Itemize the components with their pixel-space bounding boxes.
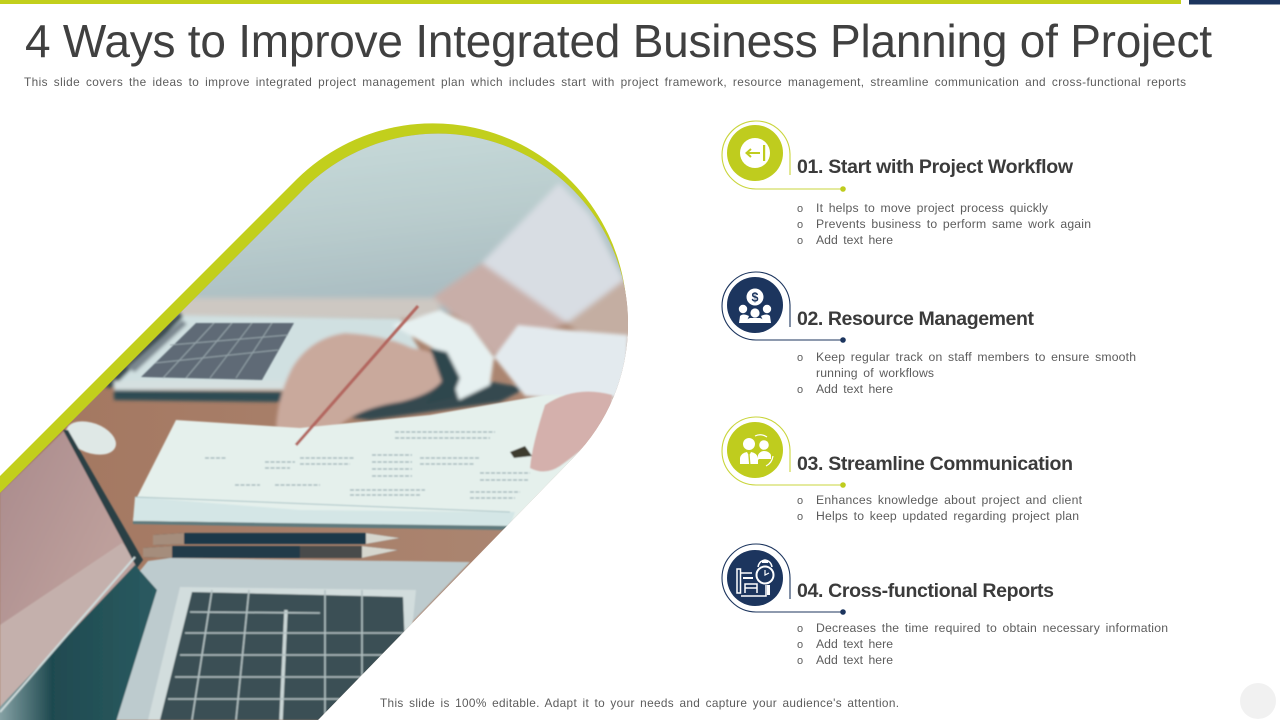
bullets 02: Keep regular track on staff members to ensure smooth xyxy=(816,350,1136,364)
item 02: resource management xyxy=(722,272,1136,396)
bullets 03: Enhances knowledge about project and client xyxy=(816,493,1083,507)
handwriting marks xyxy=(205,432,530,498)
keyboard keys xyxy=(160,592,405,720)
bullets 01 xyxy=(797,201,1091,247)
bullets 04: Add text here xyxy=(816,653,893,667)
icon: two people exchanging in green circle xyxy=(722,417,846,488)
bullets 02: o xyxy=(797,352,803,364)
mouse xyxy=(65,420,117,456)
heading 03: 03. Streamline Communication xyxy=(797,453,1073,475)
icon: report, clock and gear in navy circle xyxy=(722,544,846,615)
right hand xyxy=(530,392,612,472)
pens xyxy=(153,533,400,545)
bullets 01: o xyxy=(797,203,803,215)
second cuff xyxy=(494,325,628,402)
bullets 04: o xyxy=(797,655,803,667)
bullets 02: running of workflows xyxy=(816,366,934,380)
subtitle: This slide covers the ideas to improve integrated project management plan which includes start with project framework, resource management, streamline communication and cross-functional reports xyxy=(24,75,1186,89)
bullets 03: Helps to keep updated regarding project plan xyxy=(816,509,1079,523)
pencil xyxy=(296,306,418,445)
item 03: streamline communication xyxy=(722,417,1083,523)
heading 04: 04. Cross-functional Reports xyxy=(797,580,1054,602)
bezel and hinge xyxy=(63,430,143,568)
item 04: cross-functional reports xyxy=(722,544,1168,667)
left laptop screen xyxy=(0,430,136,629)
icon: dollar coin and team in navy circle xyxy=(722,272,846,343)
bullets 02 xyxy=(797,350,1136,396)
bullets 04: Add text here xyxy=(816,637,893,651)
bullets 01: Prevents business to perform same work again xyxy=(816,217,1091,231)
back laptop body xyxy=(106,315,420,387)
footer note: This slide is 100% editable. Adapt it to your needs and capture your audience's attention. xyxy=(380,696,899,710)
top accent bar: navy xyxy=(1189,0,1280,4)
icon: dollar coin and team in navy circle: $ xyxy=(752,290,759,304)
shadow under hands xyxy=(351,380,522,422)
icon: arrow to bar in green circle xyxy=(722,121,846,192)
bullets 01: o xyxy=(797,235,803,247)
heading 02: 02. Resource Management xyxy=(797,308,1034,330)
top accent bar: green xyxy=(0,0,1181,4)
photo: hands working on papers between laptops xyxy=(0,120,640,720)
front laptop keyboard surround xyxy=(148,587,416,720)
bullets 01: o xyxy=(797,219,803,231)
paper sheets xyxy=(133,395,628,526)
heading 01: 01. Start with Project Workflow xyxy=(797,156,1074,178)
grey corner circle xyxy=(1240,683,1276,719)
bullets 03: o xyxy=(797,511,803,523)
bullets 04: o xyxy=(797,639,803,651)
bullets 04: Decreases the time required to obtain necessary information xyxy=(816,621,1168,635)
green pill backing shape xyxy=(0,123,627,510)
bullets 04: o xyxy=(797,623,803,635)
bullets 01: It helps to move project process quickly xyxy=(816,201,1049,215)
bullets 02: o xyxy=(797,384,803,396)
bullets 03 xyxy=(797,493,1083,523)
bullets 02: Add text here xyxy=(816,382,893,396)
bullets 03: o xyxy=(797,495,803,507)
writing hand xyxy=(276,333,446,434)
bullets 01: Add text here xyxy=(816,233,893,247)
front laptop body xyxy=(112,558,470,720)
back laptop keyboard xyxy=(141,323,294,380)
shirt cuff xyxy=(392,310,494,400)
title: 4 Ways to Improve Integrated Business Planning of Project xyxy=(25,15,1212,67)
bullets 04 xyxy=(797,621,1168,667)
item 01: start with project workflow xyxy=(722,121,1091,247)
